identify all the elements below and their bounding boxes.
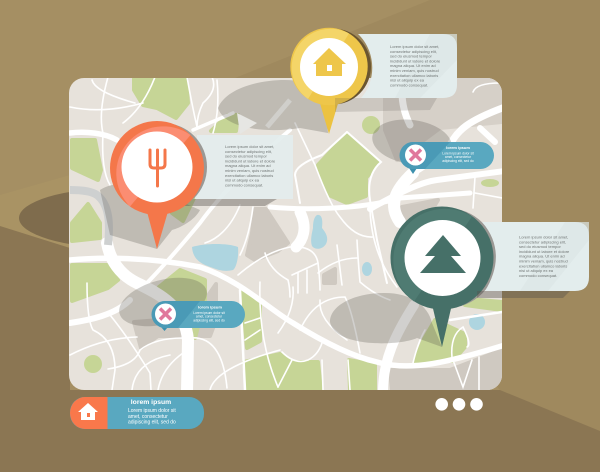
callout body text: Lorem ipsum dolor sit amet, [390, 44, 439, 49]
label text: Lorem ipsum dolor sit [442, 151, 474, 155]
grey ring road [70, 190, 109, 245]
legend: home label [70, 397, 204, 429]
icon: cross [160, 308, 171, 320]
callout body text: nisi ut aliquip ex ea [225, 178, 260, 183]
callout body text: commodo consequat. [519, 273, 557, 278]
callout body text: magna aliqua. Ut enim ad [519, 254, 565, 259]
callout body text: commodo consequat. [225, 182, 263, 187]
panel: restaurant callout [180, 135, 293, 206]
pagination dots [435, 398, 483, 411]
label text: lorem ipsum [198, 304, 222, 310]
callout body text: consectetur adipiscing elit, [225, 149, 272, 154]
callout body text: sed do eiusmod tempor [519, 244, 561, 249]
major roads [70, 92, 505, 392]
panel: home callout (top) [335, 34, 457, 112]
callout body text: exercitation ullamco laboris [225, 173, 273, 178]
icon: orange fork pin [110, 121, 207, 249]
light road overlay in shadow [237, 100, 290, 134]
panel: blue cross label (top right) [400, 142, 494, 174]
callout body text: incididunt ut labore et dolore [225, 158, 276, 163]
legend text: Lorem ipsum dolor sit [128, 408, 176, 414]
callout body text: minim veniam, quis nostrud [390, 68, 439, 73]
label text: amet, consectetur [445, 155, 472, 159]
minor streets [70, 77, 502, 390]
callout body text: sed do eiusmod tempor [390, 54, 432, 59]
callout body text: nisi ut aliquip ex ea [519, 268, 554, 273]
callout body text: nisi ut aliquip ex ea [390, 78, 425, 83]
label text: adipiscing elit, sed do [193, 318, 225, 322]
callout body text: magna aliqua. Ut enim ad [390, 63, 436, 68]
callout body text: exercitation ullamco laboris [519, 263, 567, 268]
legend text: adipiscing elit, sed do [128, 420, 176, 426]
label text: adipiscing elit, sed do [442, 159, 474, 163]
panel: blue cross label (bottom left) [152, 301, 245, 331]
callout body text: commodo consequat. [390, 82, 428, 87]
grey blocks [134, 78, 502, 390]
legend text: lorem ipsum [131, 399, 171, 406]
map shadows [100, 80, 455, 347]
callout body text: minim veniam, quis nostrud [519, 258, 568, 264]
callout shadow [335, 98, 437, 112]
callout body text: consectetur adipiscing elit, [519, 239, 566, 244]
map panel [69, 77, 505, 392]
label text: lorem ipsum [446, 145, 470, 150]
label text: Lorem ipsum dolor sit [193, 311, 225, 315]
icon: home [78, 403, 98, 420]
callout body text: Lorem ipsum dolor sit amet, [519, 234, 568, 240]
water [192, 215, 485, 330]
callout body text: incididunt ut labore et dolore [390, 58, 441, 63]
parks [72, 77, 502, 390]
callout body text: Lorem ipsum dolor sit amet, [225, 144, 274, 149]
callout body text: incididunt ut labore et dolore [519, 249, 570, 254]
icon: yellow home pin [290, 28, 371, 134]
icon: cross [410, 150, 421, 160]
callout body text: minim veniam, quis nostrud [225, 168, 274, 173]
callout body text: magna aliqua. Ut enim ad [225, 163, 271, 168]
callout body text: sed do eiusmod tempor [225, 154, 267, 159]
legend text: amet, consectetur [128, 414, 168, 420]
panel: forest callout [477, 222, 589, 298]
callout body text: consectetur adipiscing elit, [390, 49, 437, 54]
label text: amet, consectetur [196, 314, 223, 318]
park dots [84, 116, 499, 373]
icon: green tree pin [390, 206, 497, 347]
callout body text: exercitation ullamco laboris [390, 73, 438, 78]
